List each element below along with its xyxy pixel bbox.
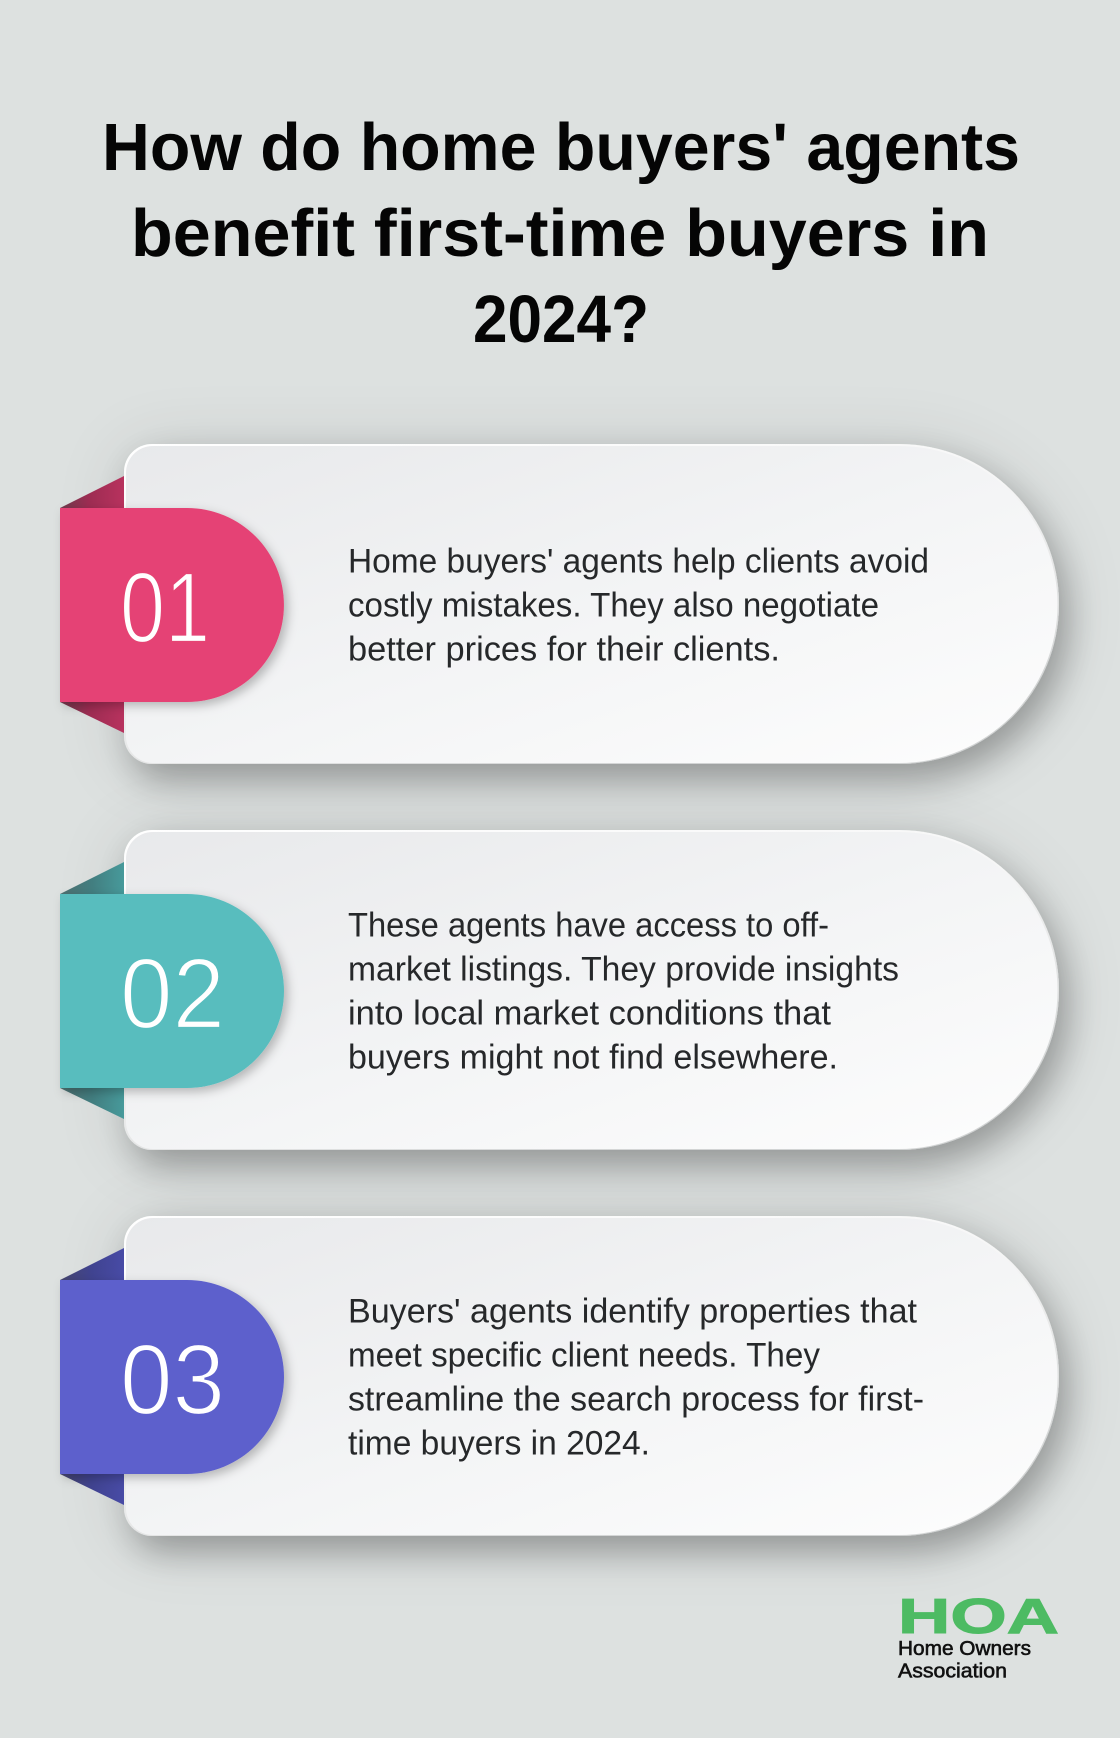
number 01: 01 [120, 552, 210, 664]
number tab 2 [60, 894, 284, 1088]
card background 2 [124, 830, 1059, 1150]
title: 2024? [473, 283, 649, 357]
description 1: costly mistakes. They also negotiate [348, 586, 879, 624]
ribbon folds 2 [60, 862, 124, 1119]
panel: step 1 [60, 444, 1059, 764]
title: How do home buyers' agents [102, 111, 1020, 185]
number tab 1 [60, 508, 284, 702]
description 3: time buyers in 2024. [348, 1424, 650, 1462]
panel: step 2 [60, 830, 1059, 1150]
number tab 3 [60, 1280, 284, 1474]
description 1: better prices for their clients. [348, 630, 780, 668]
panel: step 3 [60, 1216, 1059, 1536]
description 2: market listings. They provide insights [348, 950, 899, 988]
description 1: Home buyers' agents help clients avoid [348, 542, 929, 580]
description 3: Buyers' agents identify properties that [348, 1292, 917, 1330]
description 3: streamline the search process for first- [348, 1380, 924, 1418]
description 1 [348, 542, 929, 668]
number 03: 03 [120, 1324, 225, 1436]
description 2: These agents have access to off- [348, 906, 829, 944]
description 3 [348, 1292, 924, 1462]
description 2 [348, 906, 899, 1076]
description 2: into local market conditions that [348, 994, 831, 1032]
ribbon folds 1 [60, 476, 124, 733]
title [102, 111, 1020, 357]
logo: HOA Home Owners Association: HOA [898, 1589, 1059, 1644]
logo: HOA Home Owners Association: Association [898, 1660, 1007, 1682]
number 02: 02 [120, 938, 225, 1050]
ribbon folds 3 [60, 1248, 124, 1505]
description 2: buyers might not find elsewhere. [348, 1038, 838, 1076]
logo: HOA Home Owners Association: Home Owners [898, 1637, 1031, 1660]
logo: HOA Home Owners Association [898, 1589, 1059, 1682]
card background 1 [124, 444, 1059, 764]
card background 3 [124, 1216, 1059, 1536]
description 3: meet specific client needs. They [348, 1336, 821, 1374]
title: benefit first-time buyers in [131, 197, 989, 271]
